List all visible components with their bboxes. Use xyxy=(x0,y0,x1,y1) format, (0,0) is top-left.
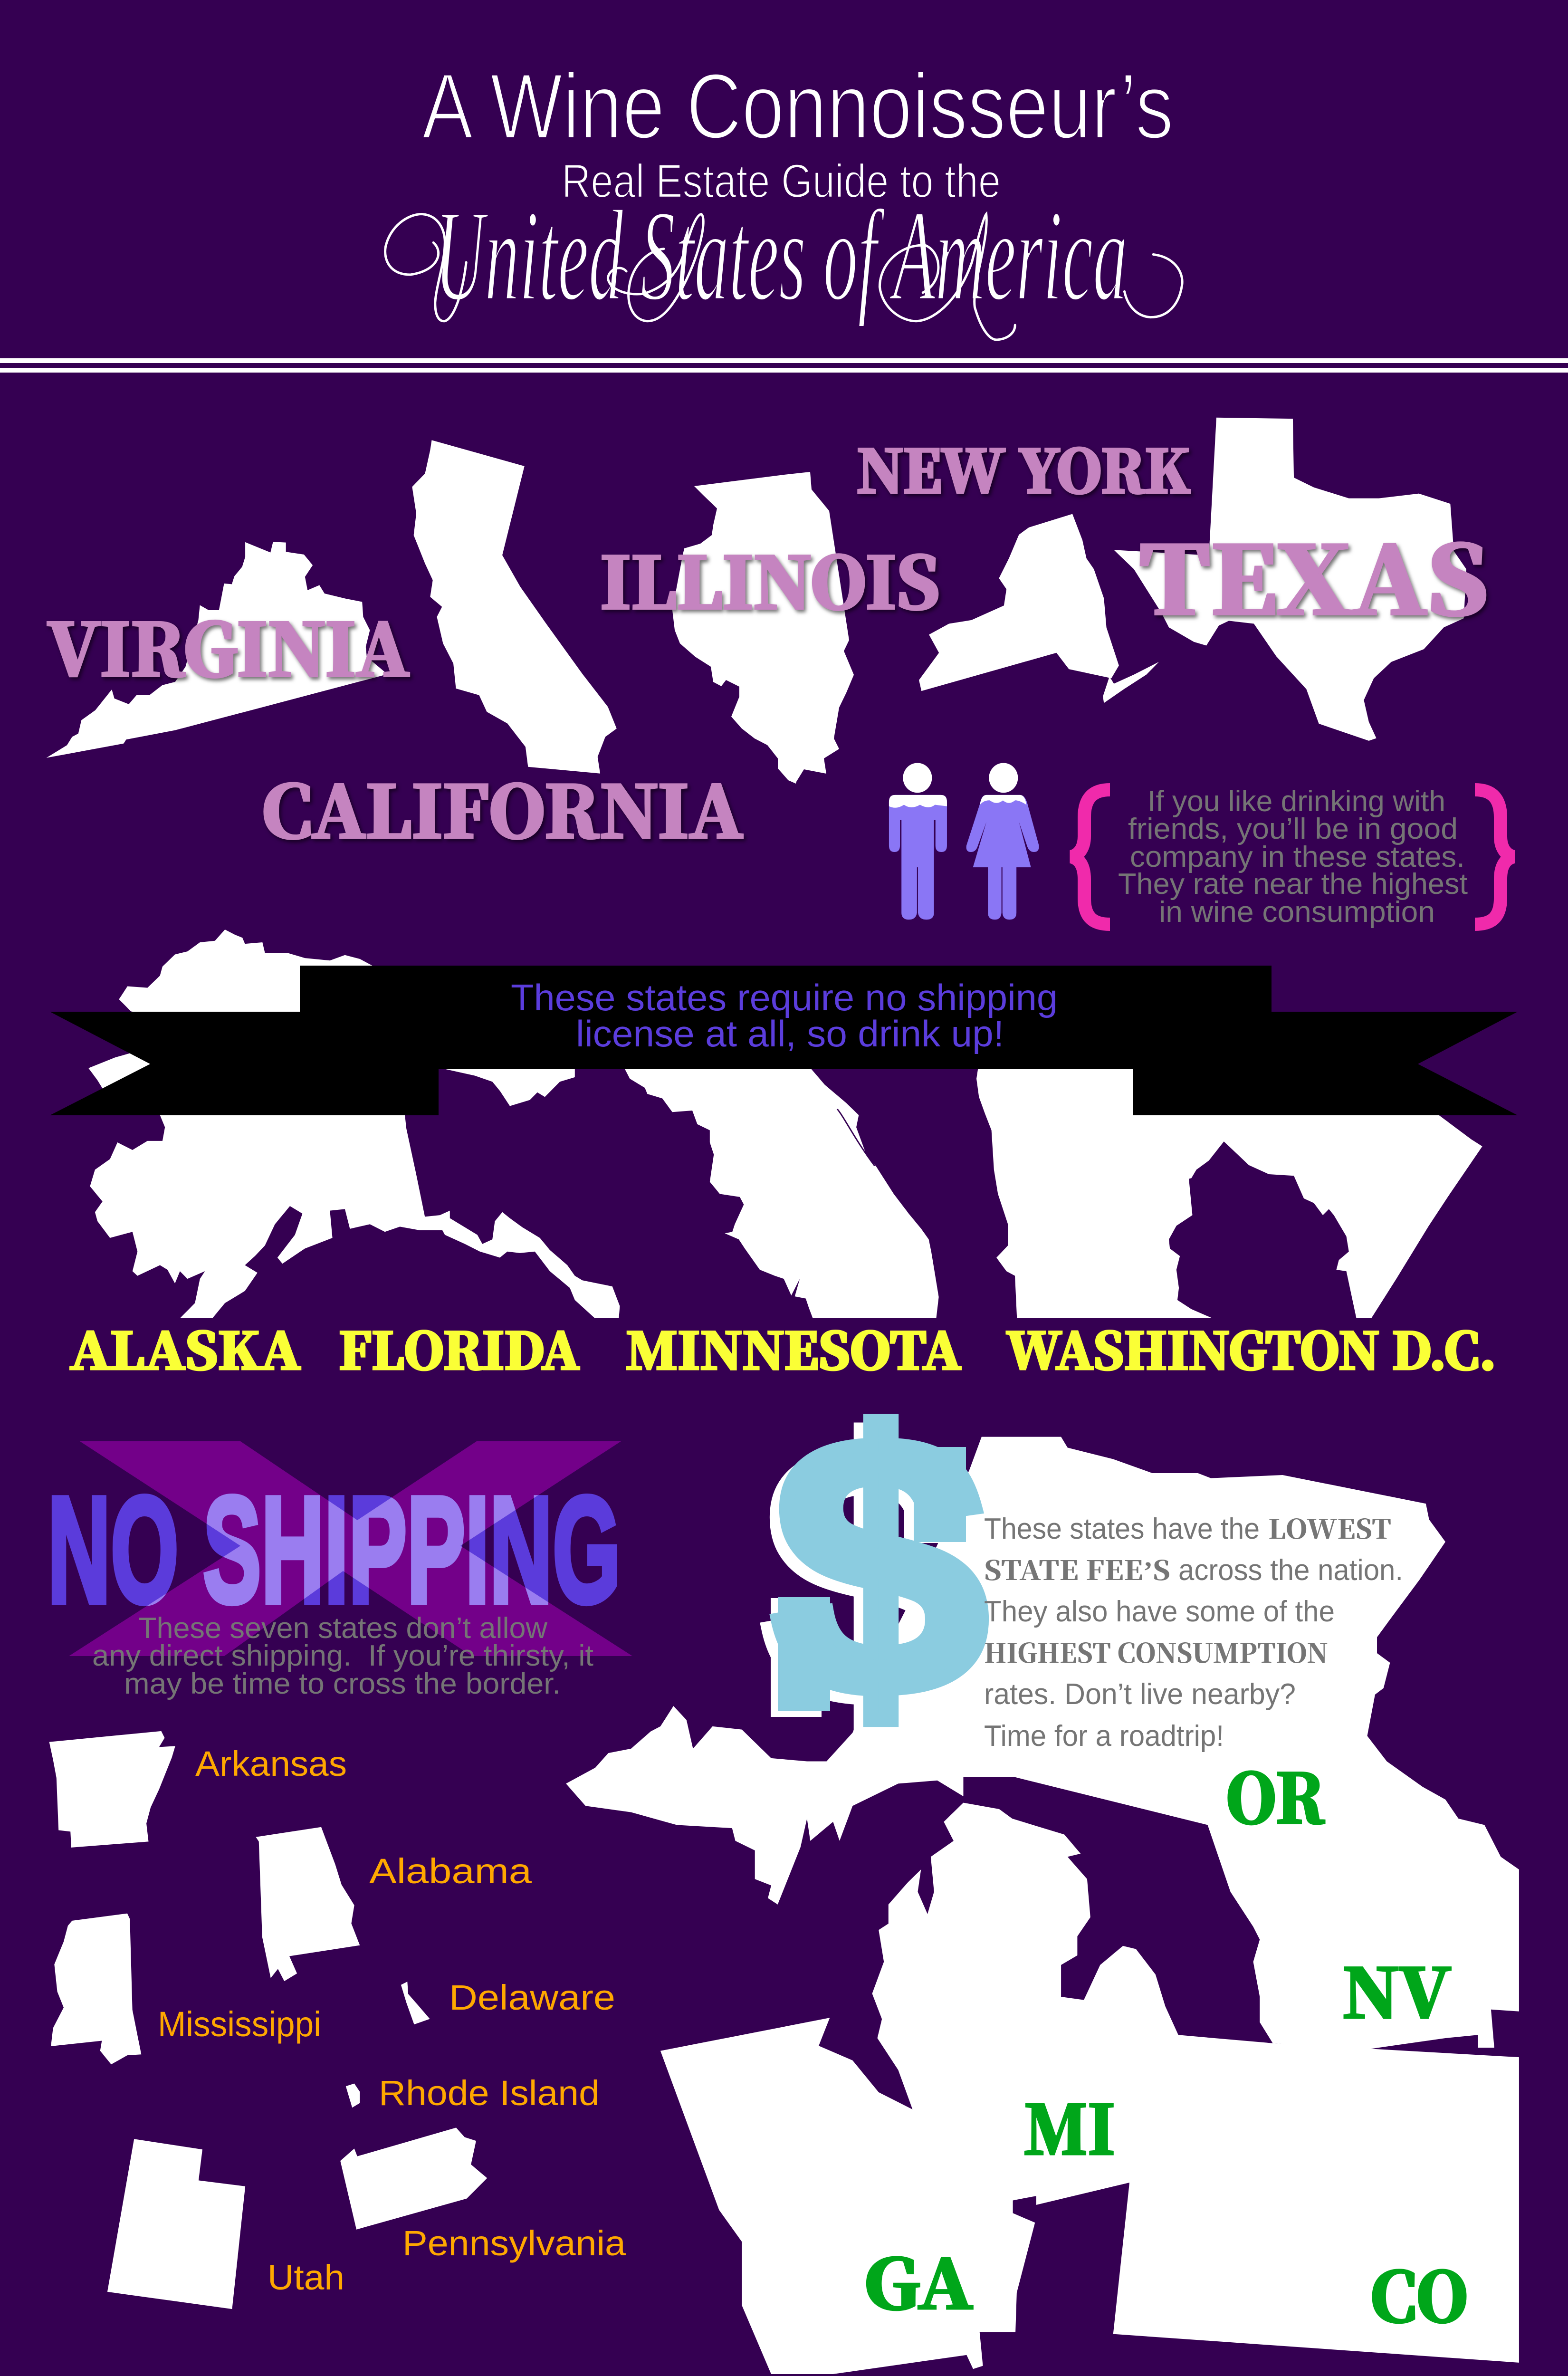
icon: dollar sign xyxy=(764,1362,987,1779)
subtitle: Real Estate Guide to the: Real Estate Guide to the xyxy=(562,154,1001,207)
panel: top wine consumption states xyxy=(47,418,1489,858)
map: Texas xyxy=(1114,418,1466,741)
callout text: If you like drinking with xyxy=(1147,785,1445,818)
map: Michigan, Georgia and Colorado xyxy=(660,1803,1519,2374)
map: Minnesota and Washington D.C. xyxy=(976,1054,1482,1318)
callout text: They rate near the highest xyxy=(1118,868,1468,901)
map: Alaska xyxy=(88,929,620,1318)
callout text: friends, you’ll be in good xyxy=(1128,813,1458,845)
label: Florida: FLORIDA xyxy=(339,1312,580,1384)
ribbon text: license at all, so drink up! xyxy=(576,1013,1004,1054)
left brace xyxy=(1071,790,1110,924)
dollar shadow: $ xyxy=(764,1370,977,1779)
title: A Wine Connoisseur's: A Wine Connoisseur’s xyxy=(422,54,1174,158)
label: Alaska: ALASKA xyxy=(70,1312,301,1384)
lowest fee text: They also have some of the xyxy=(984,1595,1335,1628)
map: California xyxy=(412,440,617,774)
lowest fee text: across the nation. xyxy=(1178,1554,1403,1587)
state name labels: Delaware xyxy=(449,1978,615,2017)
lowest fee text: Time for a roadtrip! xyxy=(984,1720,1224,1753)
panel: lowest state fee states xyxy=(566,1362,1519,2374)
map: Virginia xyxy=(47,542,387,758)
icon: man and woman figures xyxy=(889,763,1039,920)
label: Oregon: OR xyxy=(1226,1746,1325,1842)
ribbon banner xyxy=(50,966,1518,1115)
label: Illinois: ILLINOIS xyxy=(600,528,940,629)
panel: no shipping license states xyxy=(50,929,1518,1384)
state name labels: Alabama xyxy=(369,1851,532,1891)
heading: No Shipping: NO SHIPPING xyxy=(48,1466,621,1634)
label: Washington D.C.: WASHINGTON D.C. xyxy=(1006,1312,1496,1384)
ribbon text: These states require no shipping xyxy=(511,977,1058,1018)
callout text xyxy=(1118,785,1468,929)
label: Virginia: VIRGINIA xyxy=(48,594,410,696)
label: Michigan: MI xyxy=(1024,2078,1115,2174)
no shipping text xyxy=(92,1612,593,1700)
callout text: company in these states. xyxy=(1130,841,1465,873)
callout: drinking with friends xyxy=(1071,785,1514,929)
label: Colorado: CO xyxy=(1370,2245,1468,2341)
header xyxy=(385,54,1182,340)
right brace xyxy=(1475,790,1514,924)
map: New York xyxy=(919,514,1159,703)
label: New York: NEW YORK xyxy=(857,426,1190,509)
lowest fee text xyxy=(984,1509,1403,1753)
lowest fee text: HIGHEST CONSUMPTION xyxy=(984,1633,1328,1671)
state name labels: Utah xyxy=(268,2258,344,2297)
state name labels: Rhode Island xyxy=(379,2073,600,2113)
state name labels: Mississippi xyxy=(158,2004,321,2044)
lowest fee text: These states have the xyxy=(984,1513,1260,1545)
maps: seven no shipping states xyxy=(49,1731,487,2309)
no shipping text: any direct shipping. If you’re thirsty, it xyxy=(92,1639,593,1672)
label: Texas: TEXAS xyxy=(1139,508,1489,641)
dollar face: $ xyxy=(773,1362,987,1771)
label: Minnesota: MINNESOTA xyxy=(626,1312,961,1384)
state name labels: Pennsylvania xyxy=(402,2223,626,2263)
lowest fee text: LOWEST xyxy=(1268,1509,1391,1547)
callout text: in wine consumption xyxy=(1159,896,1435,929)
no shipping text: may be time to cross the border. xyxy=(124,1667,561,1700)
no shipping text: These seven states don’t allow xyxy=(138,1612,547,1645)
panel: no direct shipping xyxy=(48,1441,632,2309)
map: Oregon, Nevada and Upper Michigan xyxy=(566,1437,1519,2050)
icon: large X xyxy=(69,1441,632,1656)
map: Illinois xyxy=(672,472,854,784)
state name labels: Arkansas xyxy=(195,1744,347,1783)
header rule lines xyxy=(0,358,1568,373)
ribbon text xyxy=(511,977,1058,1054)
map: Florida xyxy=(445,1054,939,1318)
label: Nevada: NV xyxy=(1342,1941,1451,2037)
label: Georgia: GA xyxy=(864,2232,973,2328)
lowest fee text: STATE FEE ’S xyxy=(984,1550,1170,1588)
lowest fee text: rates. Don’t live nearby? xyxy=(984,1678,1296,1711)
label: California: CALIFORNIA xyxy=(262,757,743,858)
state name labels xyxy=(158,1744,626,2297)
script flourishes xyxy=(385,214,1182,340)
